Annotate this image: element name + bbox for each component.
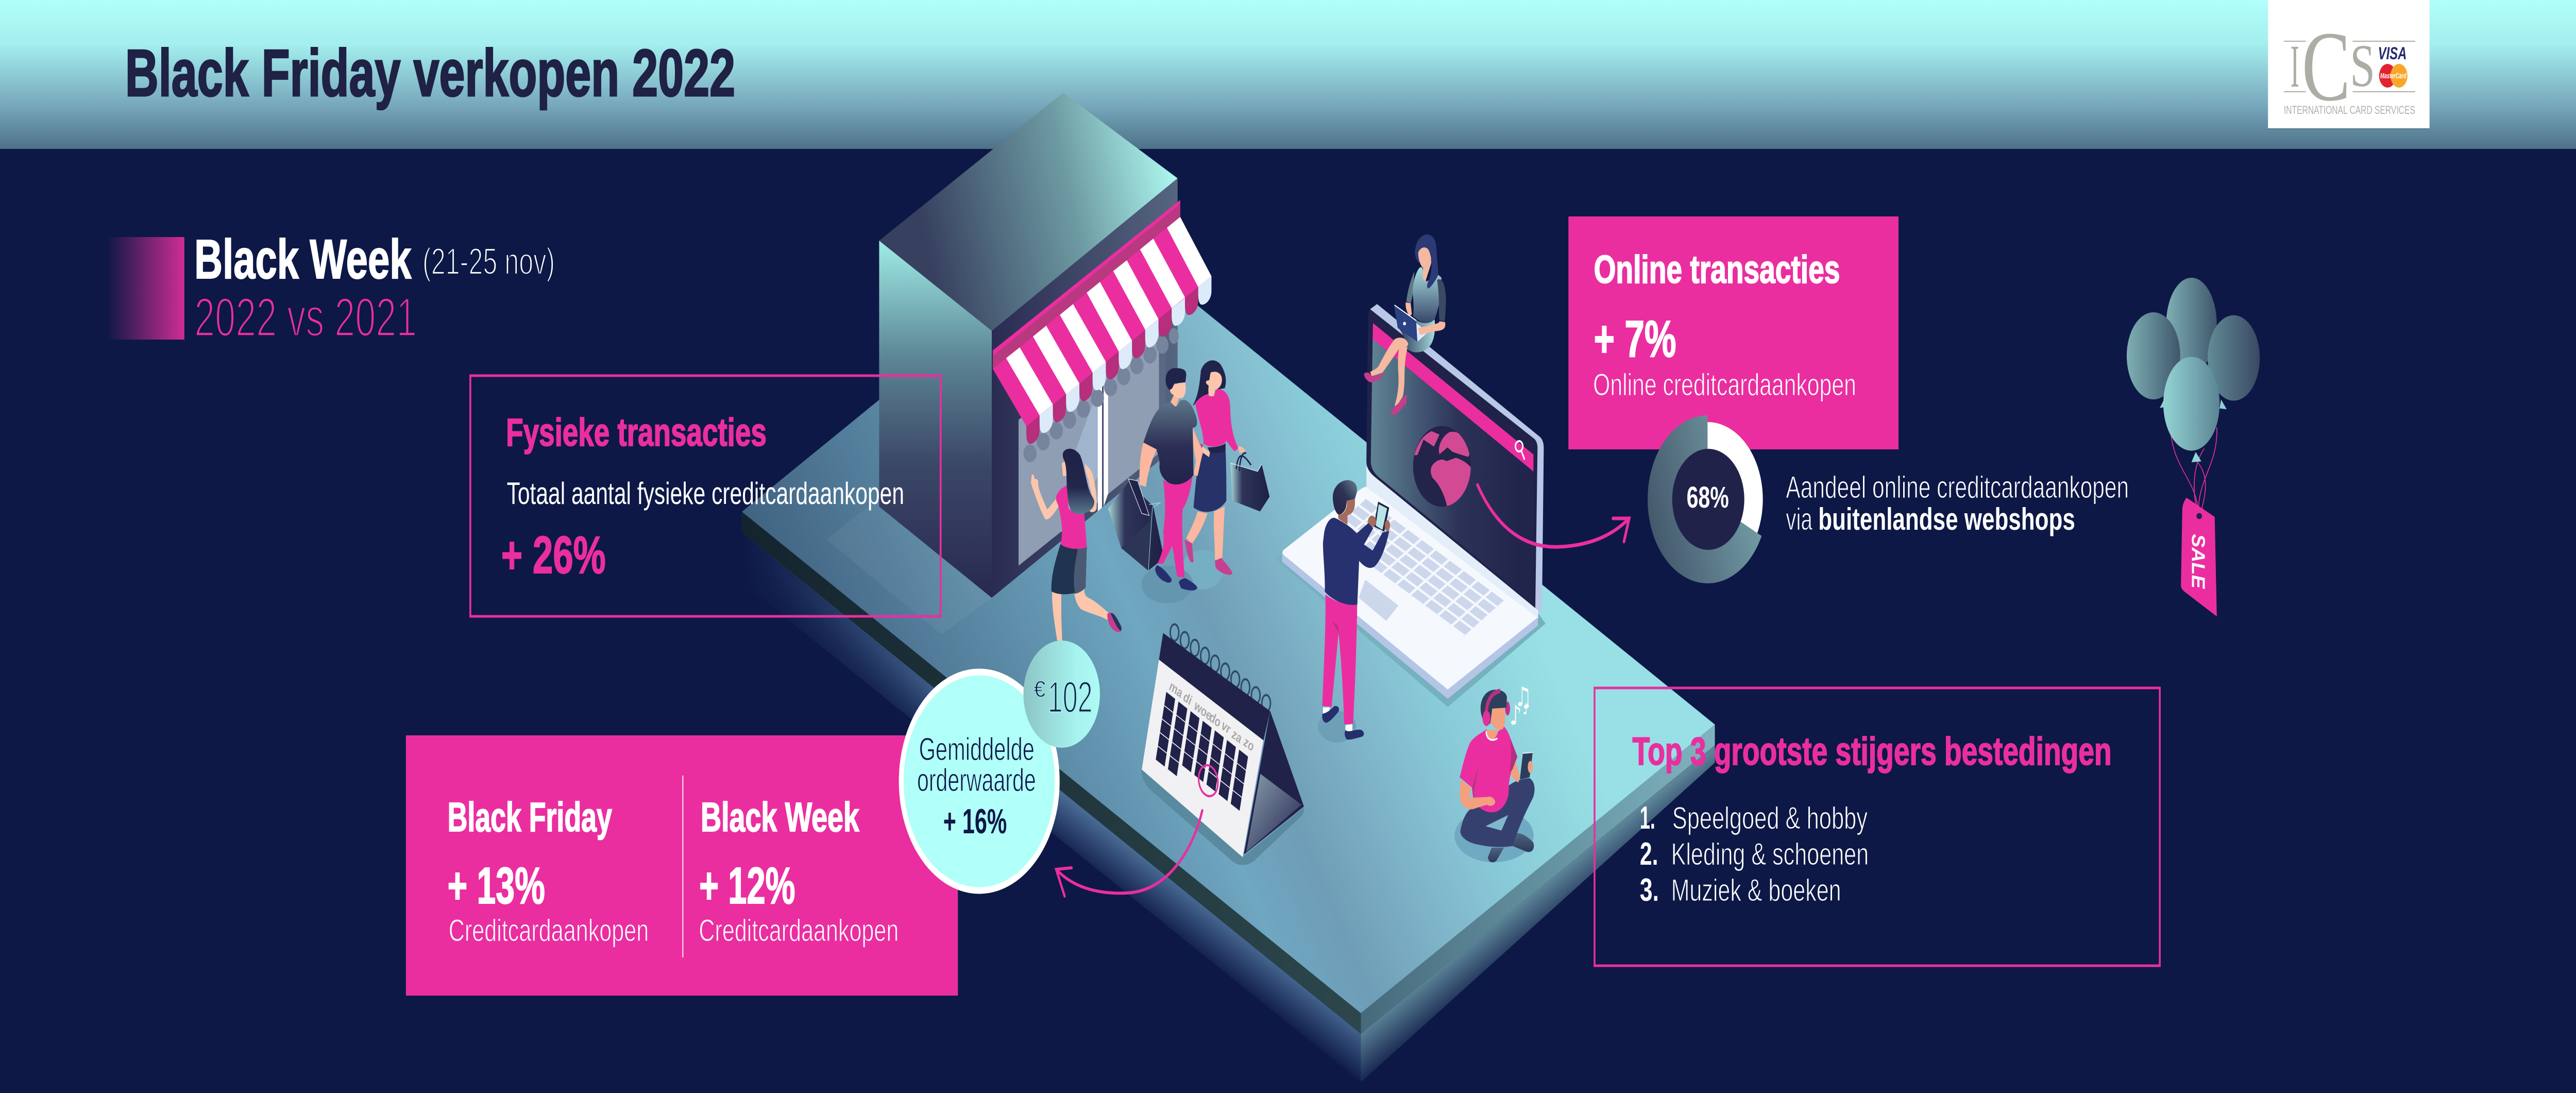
subtitle: (21-25 nov) xyxy=(422,241,555,282)
man xyxy=(1139,368,1204,591)
donut caption: Aandeel online creditcardaankopen xyxy=(1786,470,2129,505)
black week stats: + 12% xyxy=(699,857,795,915)
calendar day labels: di xyxy=(1181,690,1194,708)
store top xyxy=(879,93,1178,331)
icon: globe xyxy=(1413,426,1472,509)
black friday stats: Creditcardaankopen xyxy=(449,914,649,948)
logo: ICS Visa Mastercard: INTERNATIONAL CARD SERVICES xyxy=(2284,105,2415,117)
subtitle xyxy=(194,228,555,348)
section marker gradient xyxy=(107,237,184,340)
man with phone xyxy=(1318,480,1390,743)
laptop xyxy=(1276,304,1546,707)
calendar day labels: ma xyxy=(1167,679,1185,701)
browser bar xyxy=(1372,323,1533,472)
calendar xyxy=(1141,624,1304,865)
calendar day labels xyxy=(1167,679,1256,754)
left bags xyxy=(1108,479,1164,570)
logo: ICS Visa Mastercard: C xyxy=(2302,12,2350,122)
callout: gemiddelde orderwaarde: + 16% xyxy=(943,802,1007,841)
black friday stats xyxy=(448,794,649,948)
list item 1: Speelgoed & hobby xyxy=(1672,801,1868,836)
shop window and door xyxy=(1019,311,1179,566)
callout: gemiddelde orderwaarde: orderwaarde xyxy=(917,763,1036,798)
calendar day labels: do xyxy=(1208,710,1223,730)
list item 3: Muziek & boeken xyxy=(1671,873,1841,908)
icon: music notes: ♪ xyxy=(1523,701,1530,718)
floor shadows xyxy=(1141,550,1224,603)
store building xyxy=(879,93,1211,598)
logo: ICS Visa Mastercard: VISA xyxy=(2378,44,2406,63)
icon: music notes: ♫ xyxy=(1515,681,1532,713)
arrow: globe to donut xyxy=(1478,485,1629,547)
store front wall xyxy=(992,178,1178,598)
logo: ICS Visa Mastercard: S xyxy=(2350,32,2375,99)
awning xyxy=(993,200,1211,444)
header band xyxy=(0,0,2576,149)
logo: ICS Visa Mastercard: MasterCard xyxy=(2380,71,2406,80)
calendar day labels: zo xyxy=(1242,734,1256,754)
icon: music notes xyxy=(1510,681,1532,731)
panel: black friday and black week xyxy=(406,735,958,996)
icon: magnifier xyxy=(1515,441,1524,460)
shopping couple xyxy=(1108,360,1269,603)
woman sitting on laptop xyxy=(1364,234,1446,415)
heading: Fysieke transacties xyxy=(506,410,767,454)
calendar day labels: za xyxy=(1230,727,1244,746)
title: Black Friday verkopen 2022 xyxy=(125,36,735,110)
icon: balloons with sale tag: SALE xyxy=(2188,534,2208,590)
number: + 26% xyxy=(501,526,606,584)
panel: fysieke transacties xyxy=(470,376,941,616)
subtitle: Black Week xyxy=(194,228,412,290)
list item 2: 2. xyxy=(1640,836,1658,872)
black friday stats: + 13% xyxy=(448,857,545,915)
black week stats xyxy=(699,794,899,948)
right bag xyxy=(1230,453,1269,512)
calendar day grid xyxy=(1155,691,1250,826)
description: Totaal aantal fysieke creditcardaankopen xyxy=(507,477,904,511)
subtitle: 2022 vs 2021 xyxy=(194,287,417,348)
logo: ICS Visa Mastercard xyxy=(2268,0,2430,129)
donut caption: buitenlandse webshops xyxy=(1818,502,2075,537)
callout: order value: € xyxy=(1033,677,1045,702)
calendar day labels: vr xyxy=(1219,718,1233,737)
icon: balloons with sale tag xyxy=(2127,278,2260,616)
icon: music notes: ♪ xyxy=(1510,700,1522,731)
callout: gemiddelde orderwaarde: Gemiddelde xyxy=(919,732,1035,767)
logo: ICS Visa Mastercard: I xyxy=(2291,33,2299,100)
donut caption xyxy=(1786,470,2129,537)
isometric platform xyxy=(742,223,1715,1082)
running woman xyxy=(1031,449,1122,641)
keyboard keys xyxy=(1326,499,1506,638)
woman xyxy=(1184,360,1245,575)
donut caption: via xyxy=(1786,502,1812,537)
list item 1: 1. xyxy=(1640,800,1655,836)
panel: top 3 stijgers xyxy=(1595,688,2160,966)
person sitting with headphones xyxy=(1454,690,1535,862)
callout: order value xyxy=(1023,641,1100,748)
heading: Top 3 grootste stijgers bestedingen xyxy=(1633,729,2112,773)
store left wall xyxy=(879,241,992,598)
black friday stats: Black Friday xyxy=(448,794,612,840)
donut chart: 68% xyxy=(1648,415,1763,583)
callout: gemiddelde orderwaarde xyxy=(901,672,1057,890)
black week stats: Black Week xyxy=(701,794,859,840)
arrow: calendar to order value xyxy=(1056,811,1202,896)
panel: online transacties xyxy=(1568,216,1899,449)
description: Online creditcardaankopen xyxy=(1593,368,1856,402)
black week stats: Creditcardaankopen xyxy=(699,914,899,948)
calendar day labels: woe xyxy=(1192,698,1214,724)
list item 2: Kleding & schoenen xyxy=(1671,837,1869,872)
list item 3: 3. xyxy=(1640,872,1659,908)
callout: order value: 102 xyxy=(1048,672,1093,721)
number: + 7% xyxy=(1594,310,1676,368)
heading: Online transacties xyxy=(1594,247,1840,291)
donut chart: 68%: 68% xyxy=(1687,480,1729,514)
